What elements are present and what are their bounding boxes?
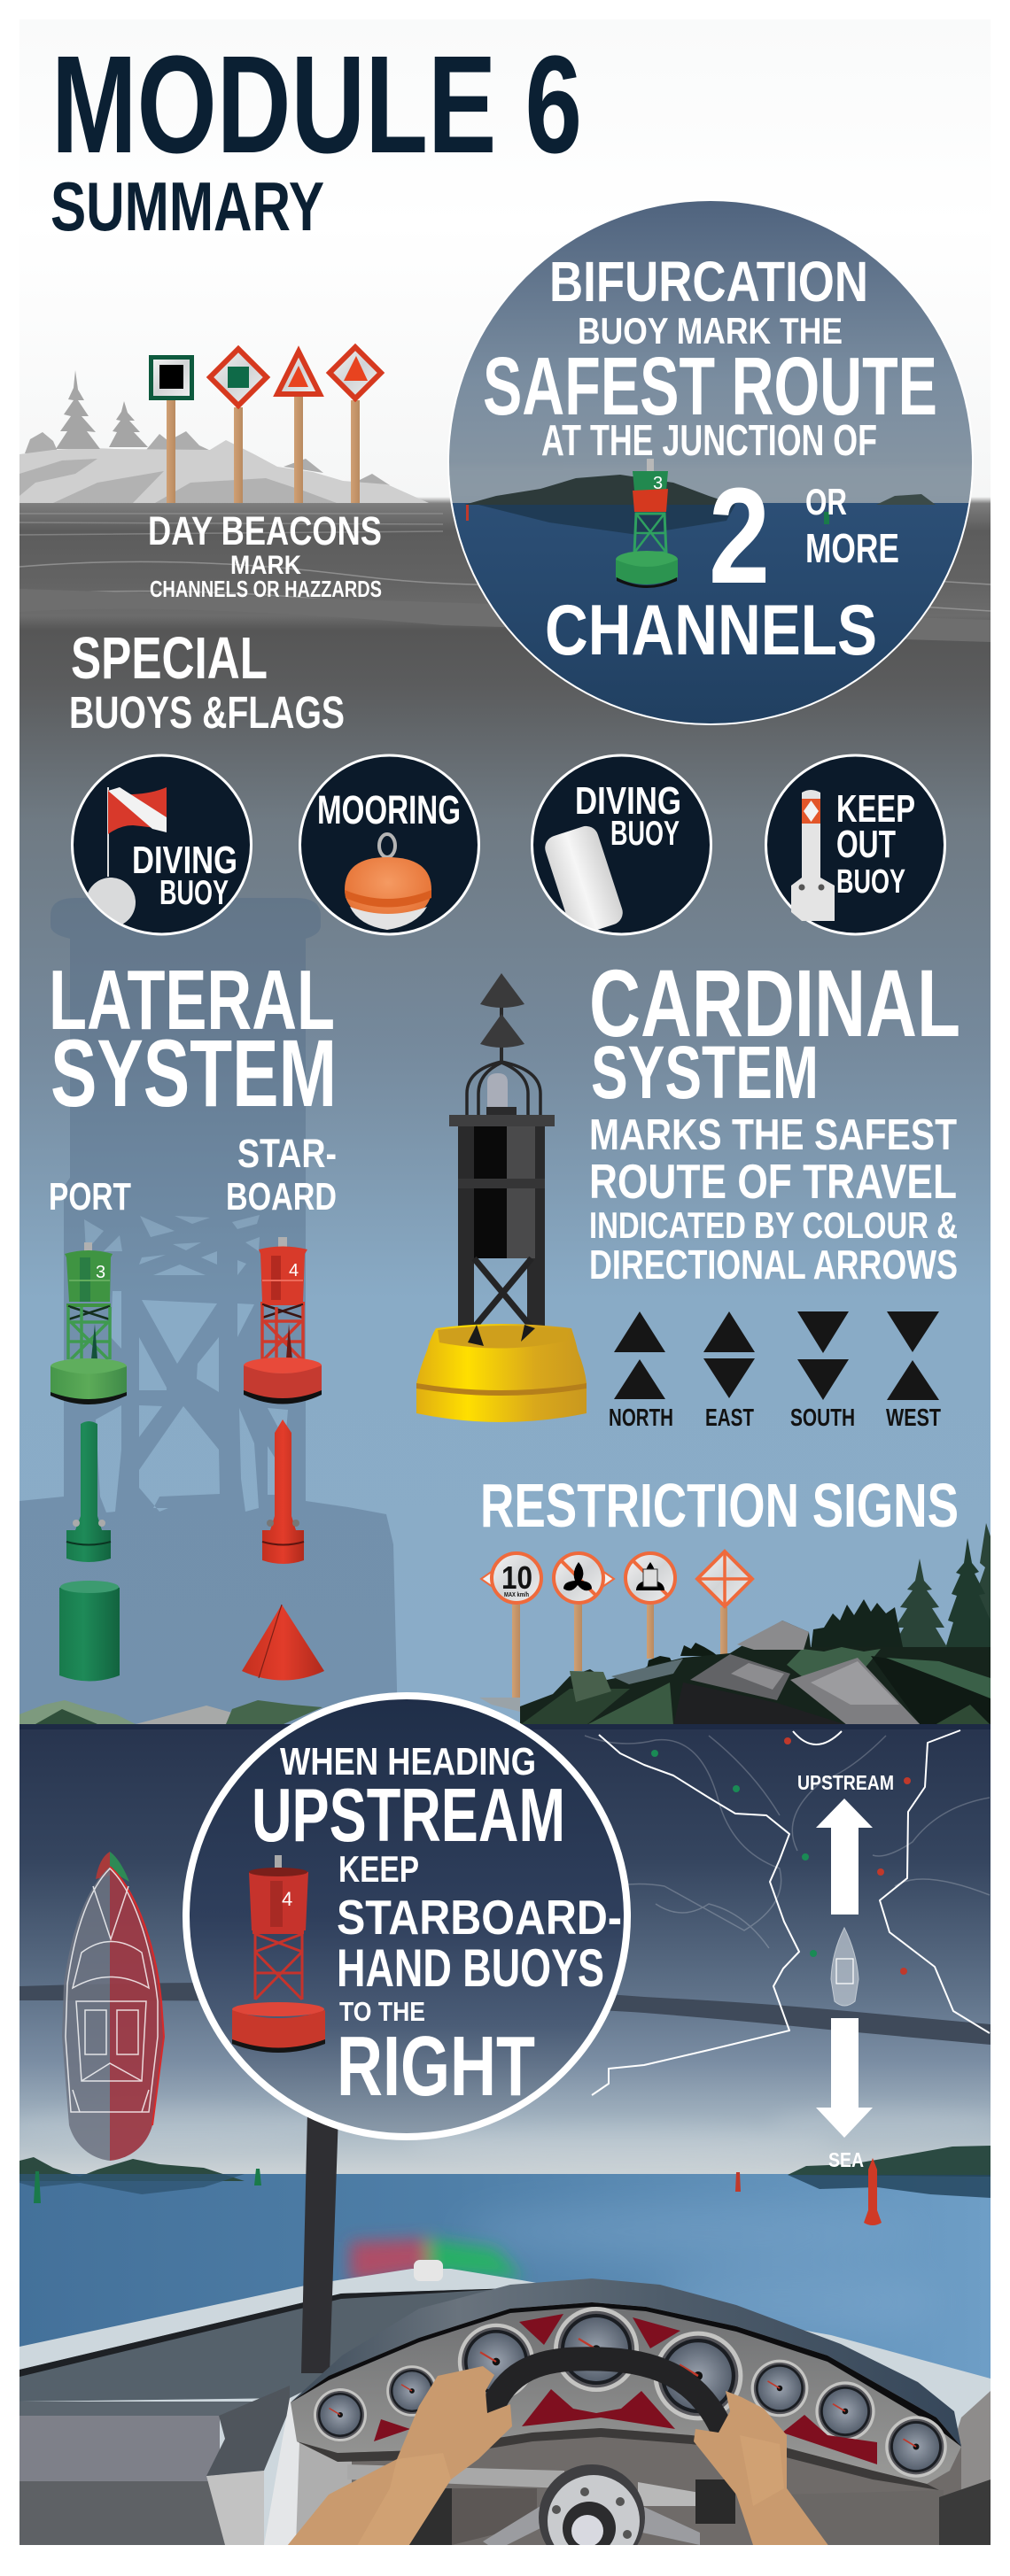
- icon: green spar buoy: [66, 1421, 111, 1562]
- left bank: [592, 1735, 799, 2095]
- grey water wave bands: [19, 514, 991, 642]
- island left distant: [19, 2157, 245, 2194]
- heading: lateral system: LATERAL: [49, 953, 335, 1048]
- north: NORTH: [609, 1404, 673, 1431]
- panel: heading upstream circle: [186, 1696, 627, 2137]
- bushes: [25, 431, 390, 485]
- panel: bifurcation circle: [443, 195, 983, 733]
- island right distant: [788, 2146, 991, 2198]
- circle: diving flag: DIVING: [132, 839, 237, 882]
- west: [886, 1311, 941, 1431]
- text: day beacons: DAY BEACONS: [148, 508, 382, 553]
- icon: tree 1: [56, 370, 100, 449]
- icon: small boat top view: [831, 1928, 858, 2006]
- arrow: sea: [816, 2018, 873, 2138]
- top cones: [480, 973, 524, 1008]
- icon: red lateral buoy: [244, 1237, 322, 1404]
- tower: [458, 1126, 545, 1258]
- legs: [458, 1258, 545, 1327]
- circle: diving buoy: [532, 755, 711, 938]
- north: [609, 1311, 673, 1431]
- bow light glow: [350, 2239, 523, 2283]
- text: day beacons: MARK: [230, 551, 301, 580]
- right bank: [880, 1730, 990, 2033]
- hood arch: [291, 2278, 961, 2447]
- restriction sign posts: [512, 1605, 727, 1698]
- hands: [284, 2366, 832, 2550]
- water: [19, 2174, 991, 2404]
- circle: keep out: OUT: [836, 823, 896, 866]
- text: when heading upstream: UPSTREAM: [252, 1774, 565, 1858]
- restriction sign icons: [481, 1551, 752, 1606]
- lower dash details: [296, 2441, 991, 2545]
- text: bifurcation: AT THE JUNCTION OF: [541, 417, 877, 465]
- text: when heading upstream: RIGHT: [337, 2019, 535, 2114]
- heading: special buoys and flags: [71, 637, 344, 728]
- gauges: [314, 2307, 947, 2478]
- heading: cardinal system: SYSTEM: [591, 1031, 819, 1114]
- circle: mooring: [299, 755, 478, 934]
- right deck: [921, 2391, 991, 2545]
- icon: tree 2: [109, 401, 148, 447]
- icon: green lateral buoy: [50, 1242, 127, 1404]
- circle: diving flag: [73, 755, 252, 934]
- icon: cardinal buoy: [416, 973, 587, 1422]
- icon: red buoy: 4: [282, 1888, 292, 1910]
- label: upstream: UPSTREAM: [797, 1771, 894, 1794]
- label: sea: SEA: [828, 2148, 864, 2171]
- background gradient sky to water: [19, 444, 991, 1724]
- rocks: [737, 1621, 809, 1650]
- sign: diamond red: [330, 347, 381, 398]
- cardinal direction marks: [609, 1311, 941, 1431]
- icon: bifurcation buoy: 3: [653, 474, 663, 493]
- lower dash: [284, 2402, 961, 2545]
- island: [464, 475, 735, 505]
- text: when heading upstream: KEEP: [338, 1848, 419, 1890]
- labels: port and starboard: STAR-: [237, 1131, 337, 1176]
- circle: mooring: MOORING: [317, 787, 461, 832]
- map buoy markers: [651, 1737, 911, 1975]
- platform: [449, 1115, 555, 1126]
- windscreen post: [301, 2037, 341, 2373]
- icon: red spar buoy: [262, 1420, 304, 1564]
- labels: port and starboard: PORT: [49, 1175, 131, 1218]
- text: bifurcation: CHANNELS: [545, 591, 877, 670]
- sign: speed limit: MAX km/h: [504, 1592, 529, 1598]
- icon: large boat top view: [62, 1852, 164, 2161]
- haze: [449, 468, 972, 495]
- icon: grey hill: [19, 440, 429, 503]
- sky: [19, 1724, 991, 2174]
- steering wheel: [492, 2359, 723, 2432]
- icon: red buoy: [232, 1855, 325, 2053]
- title: SUMMARY: [50, 167, 324, 245]
- windscreen rail: [19, 1983, 991, 2045]
- text: bifurcation: OR: [805, 481, 847, 522]
- title: MODULE 6: [51, 27, 582, 182]
- icon: white ball: [86, 878, 136, 927]
- cage: [467, 1062, 540, 1115]
- circle: keep out: BUOY: [836, 863, 905, 901]
- sign: triangle red: [277, 352, 320, 394]
- text: bifurcation: BUOY MARK THE: [578, 310, 843, 352]
- cockpit lower left: [19, 2386, 294, 2545]
- sign: speed limit: [481, 1553, 541, 1603]
- text: day beacons: [150, 516, 381, 597]
- steering hub: [483, 2464, 700, 2571]
- lighthouse shadow background: [19, 898, 398, 1724]
- right arm and hand: [694, 2391, 832, 2550]
- icon: small buoys: [466, 505, 469, 521]
- arrow: upstream: [816, 1799, 873, 1915]
- silver instrument panel: [291, 2302, 961, 2484]
- labels: port and starboard: BOARD: [226, 1175, 337, 1218]
- text: bifurcation: BIFURCATION: [549, 250, 868, 313]
- bow deck: [19, 2269, 991, 2568]
- text: when heading upstream: HAND BUOYS: [337, 1938, 604, 1998]
- text: when heading upstream: STARBOARD-: [337, 1890, 622, 1945]
- left arm and hand: [284, 2366, 512, 2550]
- yellow base: [416, 1324, 587, 1422]
- icon: green lateral buoy: 3: [96, 1263, 105, 1282]
- text: bifurcation: [483, 250, 937, 670]
- heading: cardinal system: [589, 949, 960, 1288]
- sign: diamond cross: [697, 1551, 752, 1606]
- icon: keep out buoy: [791, 790, 835, 921]
- icon: green can: [59, 1581, 120, 1681]
- circle: keep out: [765, 755, 944, 934]
- title: [51, 55, 579, 231]
- sign: diamond green: [210, 349, 267, 406]
- white pillar: [264, 2398, 303, 2545]
- day beacon signs: [151, 347, 381, 503]
- south: [790, 1311, 855, 1431]
- icon: red cone: [242, 1605, 324, 1681]
- interior and windscreen: [19, 2288, 516, 2402]
- grey island with trees: [19, 370, 429, 503]
- scene inside circle: [443, 195, 983, 733]
- sign: speed limit: 10: [501, 1559, 532, 1596]
- green slopes: [520, 1689, 630, 1725]
- icon: bifurcation buoy: [616, 459, 678, 588]
- icon: dive flag: [108, 787, 167, 834]
- panel: special buoys circles: [73, 755, 944, 938]
- circle: diving buoy: DIVING: [575, 779, 681, 823]
- text: bifurcation: MORE: [805, 525, 899, 571]
- icon: mooring buoy: [379, 834, 395, 857]
- east: EAST: [705, 1404, 754, 1431]
- circle: keep out: KEEP: [836, 787, 915, 831]
- bow light: [414, 2260, 443, 2281]
- east: [703, 1311, 755, 1431]
- west: WEST: [886, 1404, 941, 1431]
- contours: [576, 1736, 990, 1948]
- bottom scene: [9, 1724, 1001, 2571]
- bushes: [811, 1599, 904, 1652]
- text: bifurcation: 2: [709, 460, 770, 612]
- red inserts: [374, 2314, 877, 2464]
- south: SOUTH: [790, 1404, 855, 1431]
- dark landmass: [520, 1621, 991, 1725]
- posts: [167, 400, 175, 503]
- icon: red lateral buoy: 4: [289, 1261, 299, 1280]
- clouds texture: [9, 2106, 1001, 2162]
- sign: green square: [151, 358, 191, 398]
- heading: special buoys and flags: SPECIAL: [71, 625, 268, 692]
- text: day beacons: CHANNELS OR HAZZARDS: [150, 576, 382, 602]
- water highlight: [461, 2205, 939, 2338]
- foreground island right: [479, 1523, 991, 1725]
- text: when heading upstream: WHEN HEADING: [280, 1740, 536, 1783]
- labels: port and starboard: [50, 1139, 336, 1210]
- sign: no engine: [625, 1553, 675, 1603]
- red buoy on water: [864, 2158, 882, 2225]
- distant buoys: [34, 2169, 741, 2203]
- text: when heading upstream: TO THE: [339, 1996, 425, 2027]
- map overlay with channel banks: [576, 1730, 990, 2095]
- trees: [975, 1523, 991, 1647]
- hill shading: [19, 459, 337, 503]
- small island left: [19, 1700, 322, 1724]
- circle: diving flag: BUOY: [159, 874, 229, 912]
- sign: no propeller: [554, 1553, 614, 1603]
- text: when heading upstream: [252, 1740, 622, 2114]
- heading: lateral system: [52, 971, 333, 1107]
- icon: white cylinder: [545, 825, 623, 930]
- heading: lateral system: SYSTEM: [50, 1019, 337, 1126]
- circle: diving buoy: BUOY: [610, 815, 680, 853]
- heading: special buoys and flags: BUOYS &FLAGS: [69, 687, 345, 738]
